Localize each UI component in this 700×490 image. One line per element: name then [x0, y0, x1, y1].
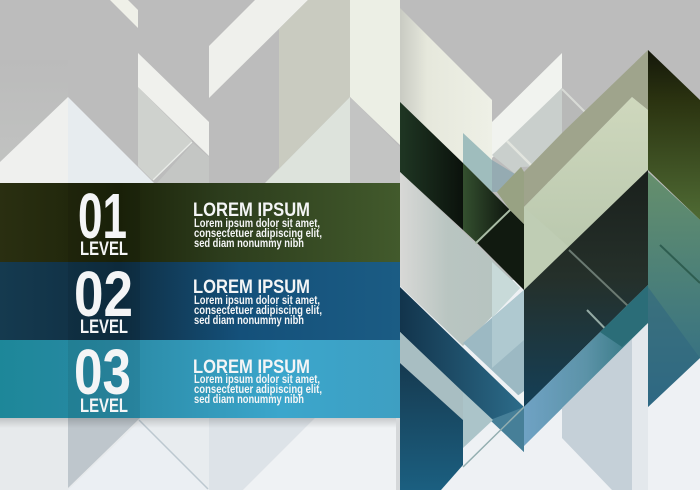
dark blue block lower left — [400, 363, 463, 490]
body text — [194, 293, 322, 327]
body text: Lorem ipsum dolor sit amet, — [194, 216, 320, 230]
olive translucent band — [497, 50, 648, 224]
number 03: 03 — [74, 336, 131, 408]
translucent gray diamond — [138, 87, 192, 180]
body text — [194, 372, 322, 406]
white strip — [492, 53, 562, 158]
cream strip — [400, 8, 492, 165]
label LEVEL: LEVEL — [80, 317, 128, 338]
body text: Lorem ipsum dolor sit amet, — [194, 293, 320, 307]
heading: LOREM IPSUM — [193, 277, 310, 298]
heading: LOREM IPSUM — [193, 200, 310, 221]
body text: sed diam nonummy nibh — [194, 236, 304, 250]
pale blue triangle — [463, 290, 524, 400]
dark right column — [648, 50, 700, 220]
pale green triangle — [265, 97, 350, 183]
number 02: 02 — [74, 258, 133, 330]
body text: sed diam nonummy nibh — [194, 392, 304, 406]
left white triangle — [0, 97, 68, 185]
cream column — [350, 0, 400, 145]
body text: consectetuer adipiscing elit, — [194, 226, 322, 240]
body text: Lorem ipsum dolor sit amet, — [194, 372, 320, 386]
diagonal light strip — [138, 53, 209, 156]
panel: right geometric shapes — [400, 8, 700, 490]
central dark chevron — [524, 170, 648, 407]
heading: LOREM IPSUM — [193, 357, 310, 378]
band 3 — [0, 336, 400, 418]
body text: consectetuer adipiscing elit, — [194, 382, 322, 396]
label LEVEL: LEVEL — [80, 396, 128, 417]
left pale blue triangle — [68, 97, 154, 185]
green to blue column — [648, 172, 700, 407]
body text: sed diam nonummy nibh — [194, 313, 304, 327]
panel: lower left geometric shapes — [0, 418, 400, 490]
olive gray column — [265, 0, 350, 183]
panel: upper left geometric shapes — [0, 0, 400, 185]
dark green strip — [400, 102, 463, 230]
band 2 — [0, 258, 400, 340]
body text: consectetuer adipiscing elit, — [194, 303, 322, 317]
pale green diamond — [524, 97, 648, 290]
gray strip lower left — [400, 332, 463, 420]
pale blue strip — [463, 133, 492, 192]
band 1 — [0, 180, 400, 262]
teal blue chevron band — [524, 285, 648, 446]
number 01: 01 — [78, 180, 127, 252]
body text — [194, 216, 322, 250]
gray blue translucent block — [562, 339, 632, 490]
small top strip — [110, 0, 138, 28]
upper strip — [209, 0, 308, 98]
gray lower patch — [157, 143, 209, 183]
translucent gray parallelogram — [492, 88, 562, 178]
blue chevron strip left — [400, 287, 524, 452]
gray diamond — [400, 172, 520, 346]
label LEVEL: LEVEL — [80, 239, 128, 260]
